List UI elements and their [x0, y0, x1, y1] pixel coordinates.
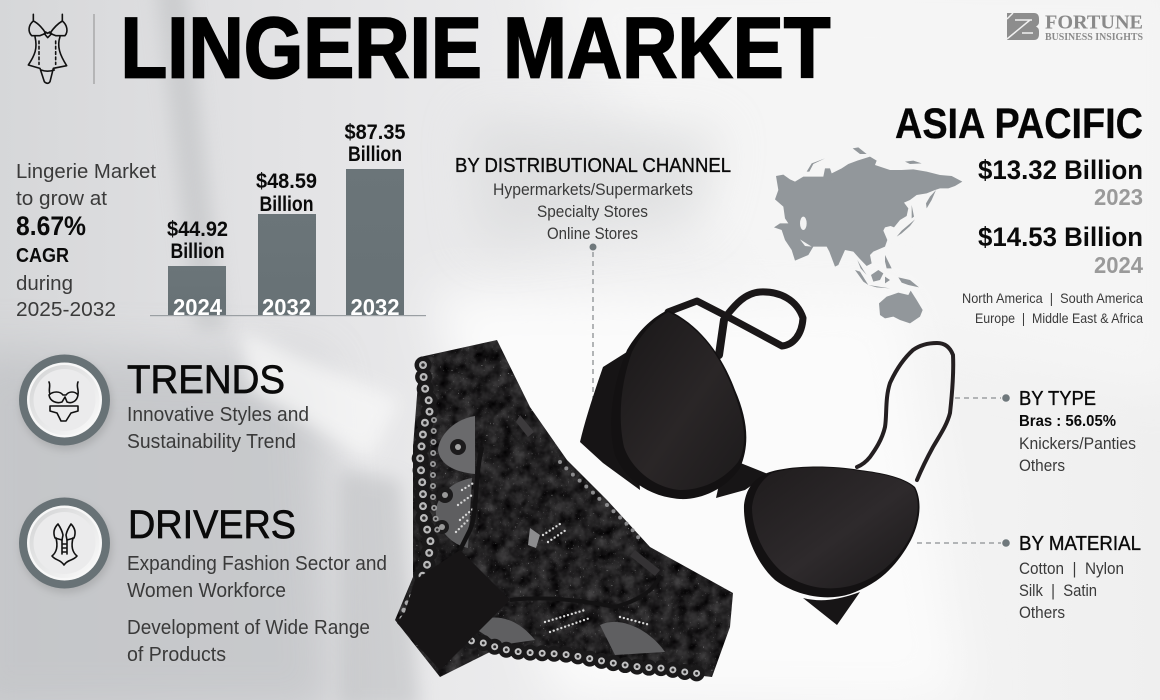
text: other regions: North America | South America	[962, 290, 1143, 306]
text: by material: Silk | Satin	[1019, 582, 1097, 600]
stat: Asia Pacific 2024: $14.53 Billion	[978, 222, 1143, 252]
text: other regions: Europe | Middle East & Africa	[975, 310, 1143, 326]
bright bead clusters	[456, 482, 650, 632]
title: LINGERIE MARKET	[120, 0, 830, 96]
text: trends description: Sustainability Trend	[127, 431, 296, 453]
bar: 2032 first: 2032	[262, 294, 311, 320]
CAGR text block: Lingerie Market	[16, 161, 156, 183]
text: by distributional channel: Online Stores	[547, 225, 638, 243]
stat: Asia Pacific 2024: 2024	[1094, 252, 1143, 278]
icon: corset	[28, 14, 67, 83]
bar: 2024: 2024	[173, 294, 222, 320]
bar: 2032 first: Billion	[260, 193, 314, 216]
text: by type: Knickers/Panties	[1019, 435, 1136, 453]
bra bridge	[716, 462, 768, 498]
text: trends description	[127, 404, 309, 453]
text: drivers description: of Products	[127, 644, 226, 666]
text: by material: Others	[1019, 604, 1065, 622]
photo: lace panties	[390, 335, 740, 685]
gusset	[397, 550, 510, 670]
CAGR text block	[16, 161, 156, 321]
bar: 2032 first: $48.59	[256, 170, 317, 193]
logo: Fortune Business Insights	[1007, 12, 1143, 43]
connector: by type	[955, 394, 1010, 402]
bar: 2032 second: Billion	[348, 143, 402, 166]
CAGR text block: to grow at	[16, 188, 107, 210]
lace scallop beads	[402, 365, 708, 673]
stat: Asia Pacific 2024	[978, 222, 1143, 278]
text: by material: Cotton | Nylon	[1019, 560, 1124, 578]
text: by type: Bras : 56.05%	[1019, 413, 1116, 430]
right cup	[744, 467, 920, 597]
stat: Asia Pacific 2023: $13.32 Billion	[978, 155, 1143, 185]
heading: trends: TRENDS	[127, 358, 285, 402]
text: by type: Others	[1019, 457, 1065, 475]
left cup	[611, 310, 746, 499]
text: by distributional channel	[455, 155, 731, 243]
text: by distributional channel: BY DISTRIBUTIONAL CHANNEL	[455, 155, 731, 177]
bar: 2032 second: 2032	[350, 294, 400, 320]
bar chart	[150, 121, 426, 320]
icon: trends badge	[19, 354, 112, 450]
icon: drivers badge	[19, 498, 112, 593]
CAGR text block: CAGR	[16, 245, 69, 267]
sheer panels	[438, 416, 475, 474]
text: by distributional channel: Specialty Stores	[537, 203, 648, 221]
bar: 2024: $44.92	[167, 218, 228, 241]
text: trends description: Innovative Styles and	[127, 404, 309, 426]
heading: drivers: DRIVERS	[128, 503, 296, 547]
bar: 2024	[167, 218, 228, 320]
CAGR text block: 8.67%	[16, 211, 86, 241]
divider	[94, 14, 95, 84]
bra back band	[580, 350, 640, 490]
logo: Fortune Business Insights: FORTUNE	[1045, 12, 1143, 34]
bar: 2024: Billion	[170, 240, 224, 263]
bar: 2032 second: $87.35	[344, 121, 406, 144]
CAGR text block: 2025-2032	[16, 299, 116, 321]
text: other regions	[962, 290, 1143, 326]
bra straps	[668, 292, 953, 480]
stat: Asia Pacific 2023: 2023	[1094, 184, 1143, 210]
text: drivers description: Women Workforce	[127, 580, 286, 602]
connector: by material	[917, 539, 1010, 547]
map: Asia Pacific	[774, 147, 962, 323]
lace flowers	[450, 439, 466, 455]
text: drivers description: Development of Wide Range	[127, 617, 370, 639]
bar: 2032 second	[344, 121, 406, 320]
text: by type	[1019, 388, 1136, 475]
connector: distribution channel	[590, 244, 596, 402]
stat: Asia Pacific 2023	[978, 155, 1143, 210]
text: by material	[1019, 533, 1141, 622]
text: by distributional channel: Hypermarkets/Supermarkets	[493, 181, 693, 199]
text: by material: BY MATERIAL	[1019, 533, 1141, 555]
photo: black bra	[580, 292, 953, 625]
bar: 2032 first	[256, 170, 317, 320]
seams	[460, 447, 482, 550]
logo: Fortune Business Insights: BUSINESS INSIGHTS	[1045, 32, 1143, 43]
text: drivers description: Expanding Fashion Sector and	[127, 553, 387, 575]
text: by type: BY TYPE	[1019, 388, 1096, 410]
text: drivers description	[127, 553, 387, 666]
CAGR text block: during	[16, 273, 73, 295]
